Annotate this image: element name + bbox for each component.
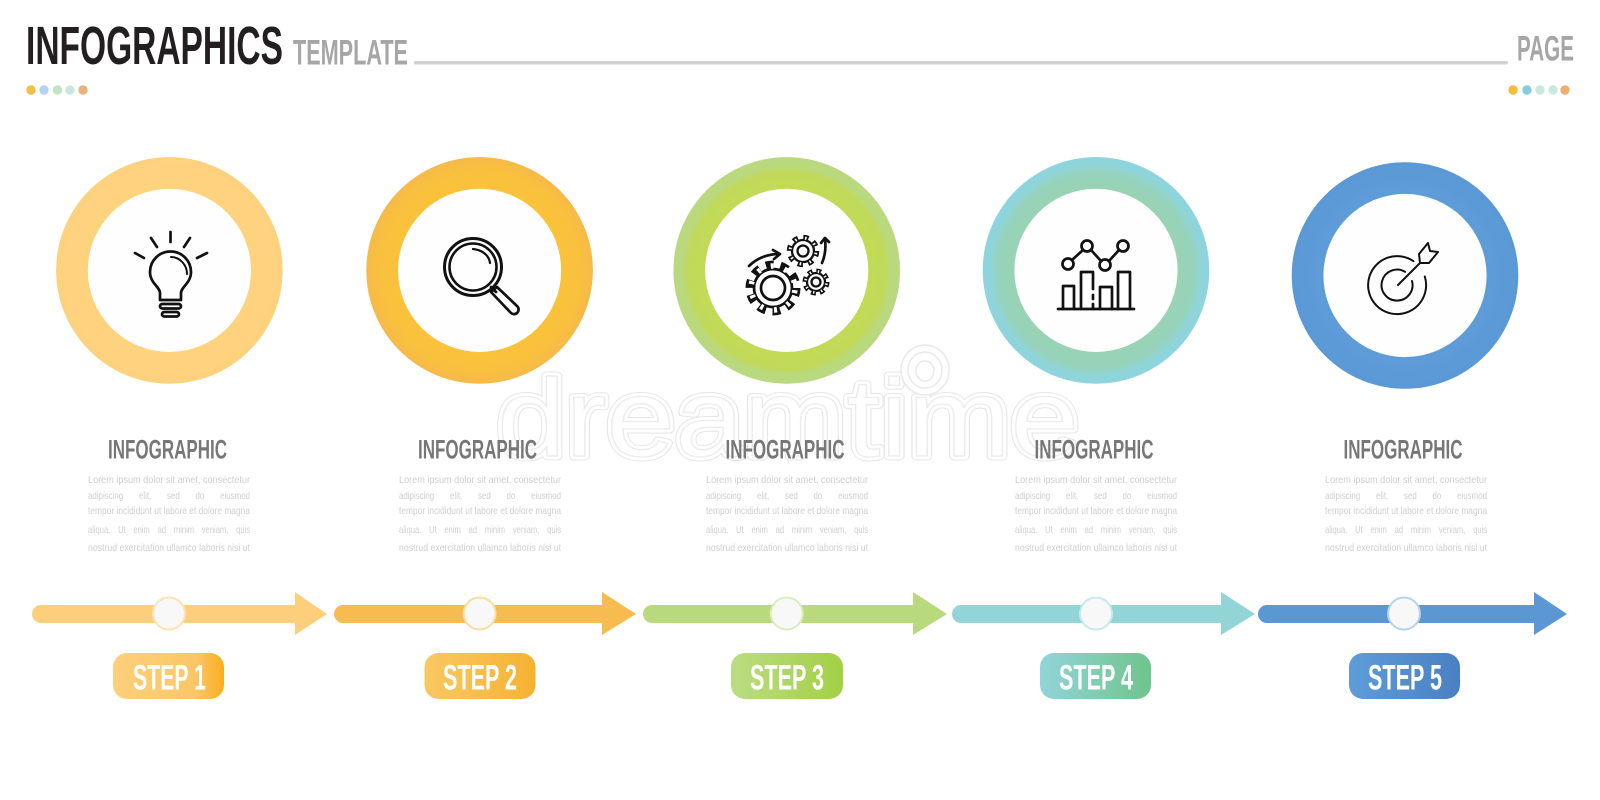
body text: Lorem ipsum dolor sit amet, consectetur: [706, 474, 868, 486]
left header dots: [26, 85, 88, 95]
body text: Lorem ipsum dolor sit amet, consectetur: [1015, 474, 1177, 486]
panel: step 1: [32, 157, 327, 699]
icon: magnifying glass: [444, 238, 519, 314]
watermark: dreamtime: [497, 357, 1079, 480]
right header dots: [1508, 85, 1570, 95]
icon: target with dart: [1368, 243, 1438, 314]
panel: step 2: [334, 157, 636, 699]
body text: adipiscing elit, sed do eiusmod: [399, 490, 561, 502]
subtitle: TEMPLATE: [293, 34, 408, 72]
heading: INFOGRAPHIC: [108, 434, 227, 464]
arrow 5: [1258, 592, 1567, 635]
body text: tempor incididunt ut labore et dolore magna: [1325, 505, 1487, 517]
body text: adipiscing elit, sed do eiusmod: [706, 490, 868, 502]
step badge 1: [113, 653, 224, 699]
body text: [88, 474, 250, 554]
body text: adipiscing elit, sed do eiusmod: [1325, 490, 1487, 502]
title: INFOGRAPHICS: [26, 16, 283, 76]
arrow 4: [952, 592, 1255, 635]
body text: aliqua. Ut enim ad minim veniam, quis: [399, 524, 561, 536]
body text: adipiscing elit, sed do eiusmod: [88, 490, 250, 502]
ring 1: [56, 157, 283, 384]
ring 5: [1292, 162, 1518, 389]
ring 3: [673, 157, 900, 384]
step badge 1: STEP 1: [133, 658, 206, 698]
body text: nostrud exercitation ullamco laboris nisi ut: [88, 542, 250, 554]
icon: gears: [749, 238, 829, 310]
body text: adipiscing elit, sed do eiusmod: [1015, 490, 1177, 502]
watermark: dreamtime: [497, 357, 1079, 480]
marker 2: [463, 596, 497, 630]
arrow 2: [334, 592, 636, 635]
step badge 3: [731, 653, 843, 699]
body text: [1015, 474, 1177, 554]
icon: line and bar chart: [1058, 240, 1134, 309]
body text: nostrud exercitation ullamco laboris nisi ut: [399, 542, 561, 554]
marker 4: [1079, 596, 1113, 630]
body text: aliqua. Ut enim ad minim veniam, quis: [1325, 524, 1487, 536]
ring 4: [983, 157, 1209, 384]
ring 2: [366, 157, 593, 384]
body text: Lorem ipsum dolor sit amet, consectetur: [88, 474, 250, 486]
body text: nostrud exercitation ullamco laboris nisi ut: [1325, 542, 1487, 554]
marker 1: [152, 596, 186, 630]
watermark: dreamtime: [497, 357, 1079, 480]
panel: step 4: [952, 157, 1255, 699]
body text: aliqua. Ut enim ad minim veniam, quis: [1015, 524, 1177, 536]
step badge 5: [1349, 653, 1460, 699]
step badge 2: [424, 653, 536, 699]
body text: tempor incididunt ut labore et dolore magna: [399, 505, 561, 517]
step badge 4: [1040, 653, 1151, 699]
body text: Lorem ipsum dolor sit amet, consectetur: [399, 474, 561, 486]
body text: [399, 474, 561, 554]
body text: [1325, 474, 1487, 554]
arrow 3: [643, 592, 947, 635]
body text: tempor incididunt ut labore et dolore magna: [706, 505, 868, 517]
marker 5: [1387, 596, 1421, 630]
step badge 4: STEP 4: [1059, 658, 1133, 698]
body text: tempor incididunt ut labore et dolore magna: [1015, 505, 1177, 517]
heading: INFOGRAPHIC: [418, 434, 537, 464]
body text: nostrud exercitation ullamco laboris nisi ut: [1015, 542, 1177, 554]
marker 3: [770, 596, 804, 630]
arrow 1: [32, 592, 327, 635]
header rule: [414, 61, 1508, 64]
icon: light bulb: [135, 232, 207, 316]
panel: step 3: [643, 157, 947, 699]
body text: Lorem ipsum dolor sit amet, consectetur: [1325, 474, 1487, 486]
body text: aliqua. Ut enim ad minim veniam, quis: [88, 524, 250, 536]
body text: nostrud exercitation ullamco laboris nisi ut: [706, 542, 868, 554]
panel: step 5: [1258, 162, 1567, 699]
heading: INFOGRAPHIC: [726, 434, 844, 464]
step badge 5: STEP 5: [1368, 658, 1442, 698]
body text: aliqua. Ut enim ad minim veniam, quis: [706, 524, 868, 536]
body text: [706, 474, 868, 554]
step badge 3: STEP 3: [750, 658, 824, 698]
heading: INFOGRAPHIC: [1034, 434, 1154, 464]
step badge 2: STEP 2: [443, 658, 517, 698]
body text: tempor incididunt ut labore et dolore magna: [88, 505, 250, 517]
heading: INFOGRAPHIC: [1344, 434, 1462, 464]
